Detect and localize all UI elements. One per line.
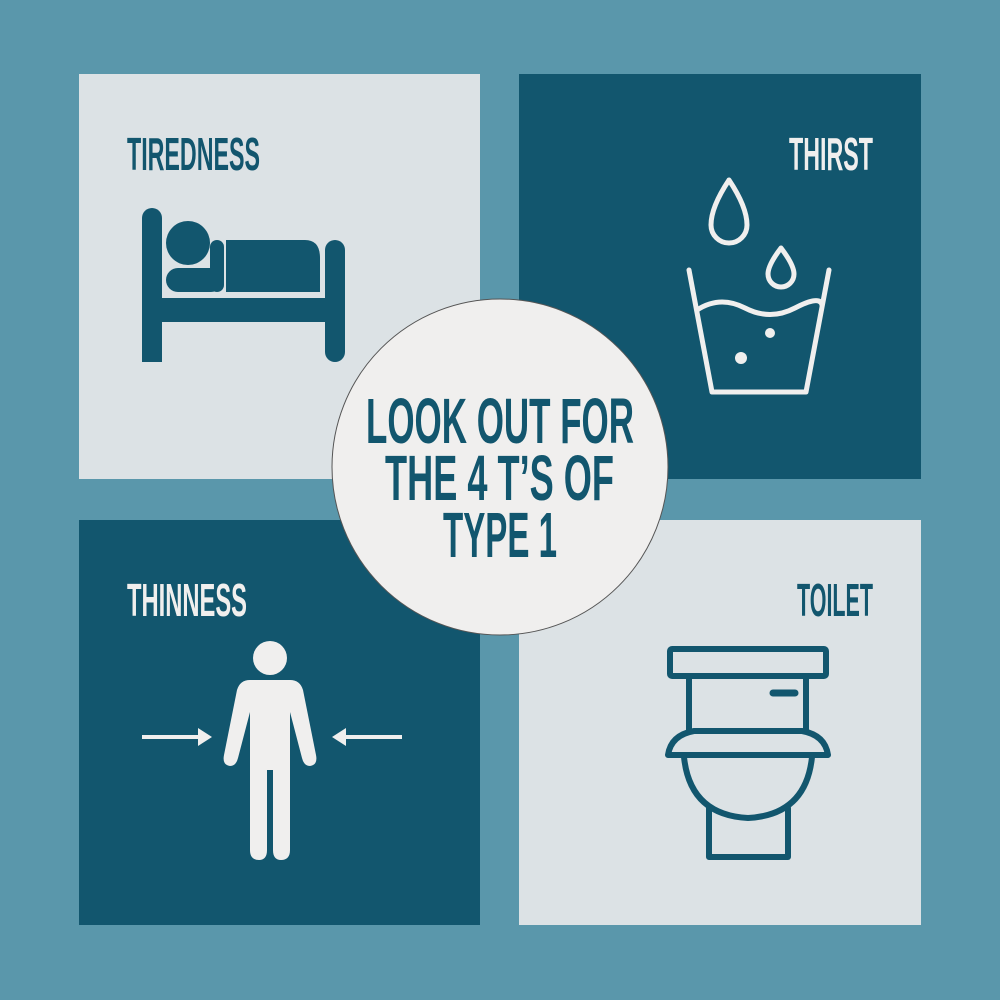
center circle [332,299,668,635]
title text: THE 4 T’S OF [385,442,614,514]
title text [366,385,634,571]
panel: tiredness [79,74,480,479]
icon: toilet [668,649,828,857]
heading: thinness: THINNESS [127,574,247,626]
title text: TYPE 1 [443,499,557,571]
heading: tiredness: TIREDNESS [127,128,260,180]
icon: person with arrows [142,641,402,860]
panel: toilet: TOILET [797,574,873,626]
heading: thirst: THIRST [789,128,873,180]
panel: thirst [519,74,921,479]
icon: glass with drops [689,180,829,392]
panel: thinness [79,520,480,925]
icon: bed [142,208,345,362]
panel: toilet [519,520,921,925]
title text: LOOK OUT FOR [366,385,634,457]
